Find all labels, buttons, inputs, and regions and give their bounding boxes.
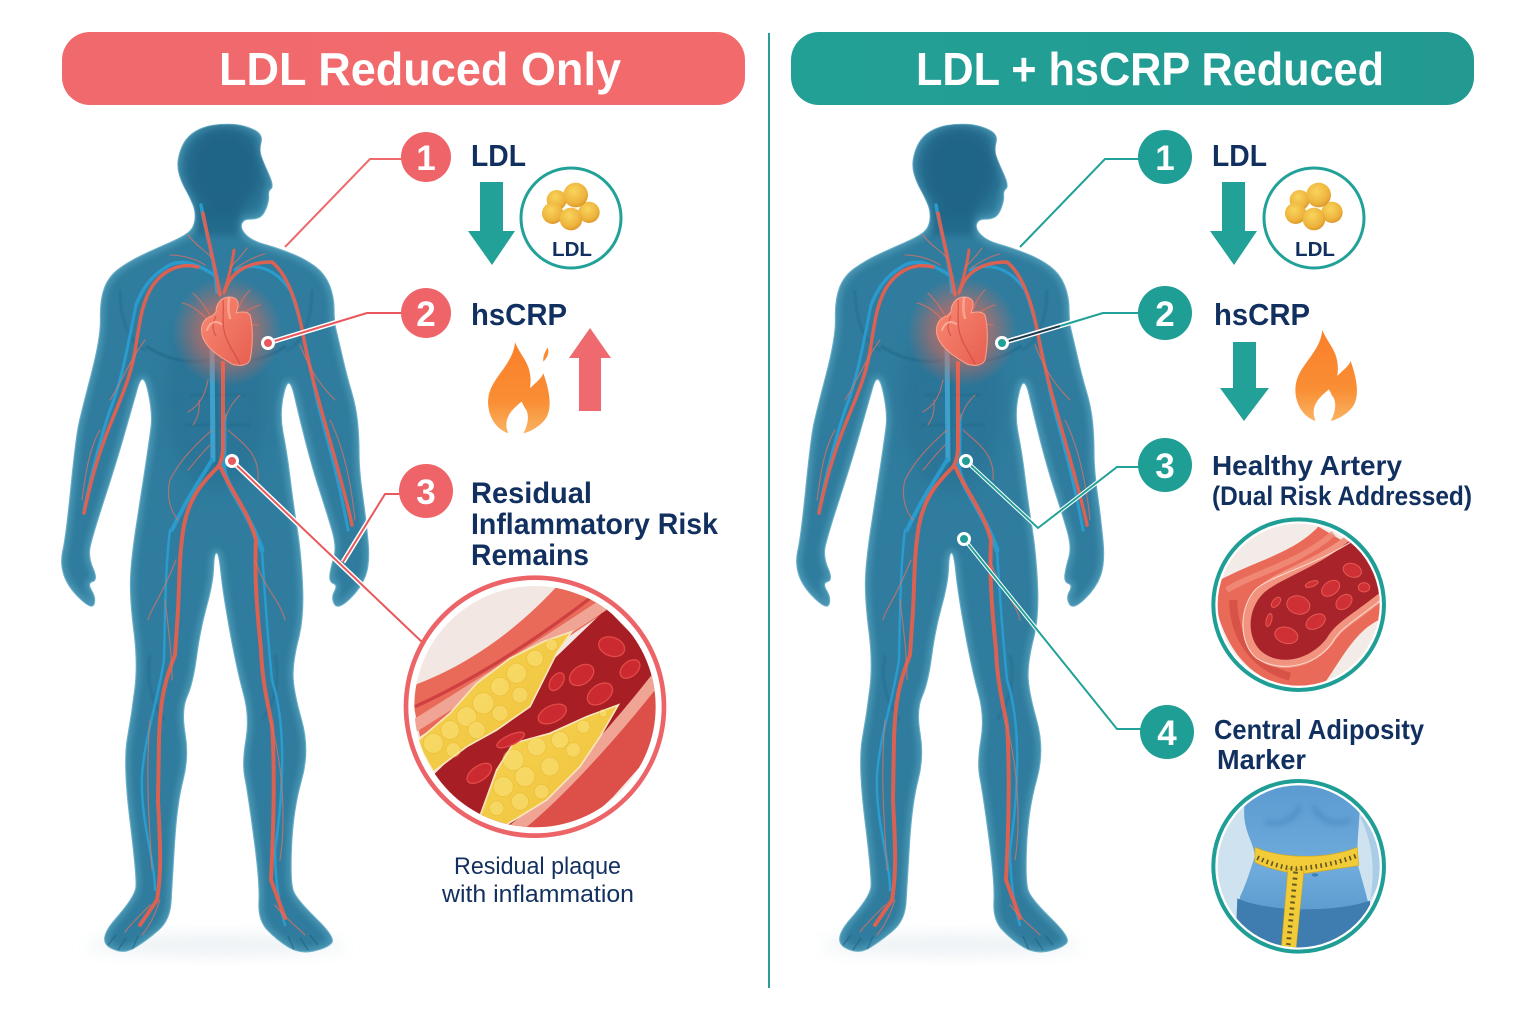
marker 2 bbox=[401, 288, 451, 338]
label: residual inflammatory risk: Remains bbox=[471, 539, 589, 572]
human body figure with circulation bbox=[797, 124, 1104, 955]
caption: residual plaque: Residual plaque bbox=[454, 853, 621, 880]
label: LDL: LDL bbox=[1212, 138, 1267, 173]
icon: LDL particles: LDL bbox=[1295, 239, 1335, 261]
marker 1: 1 bbox=[1155, 139, 1175, 178]
label: healthy artery: (Dual Risk Addressed) bbox=[1212, 481, 1472, 511]
icon: flame bbox=[1295, 330, 1357, 421]
marker 2: 2 bbox=[416, 295, 436, 334]
leader line to marker 4 bbox=[958, 534, 1142, 729]
panel: LDL Reduced Only bbox=[62, 32, 745, 955]
marker 1: 1 bbox=[416, 139, 436, 178]
icon: LDL particles: LDL bbox=[552, 239, 592, 261]
marker 4: 4 bbox=[1157, 714, 1177, 753]
marker 3: 3 bbox=[1155, 447, 1175, 486]
marker 1 bbox=[1138, 130, 1192, 184]
label: residual inflammatory risk: Residual bbox=[471, 477, 592, 510]
label: hsCRP: hsCRP bbox=[1214, 297, 1310, 332]
leader line to marker 3 bbox=[960, 456, 1142, 528]
label: central adiposity marker bbox=[1214, 714, 1424, 775]
label: hsCRP: hsCRP bbox=[471, 297, 567, 332]
leader line to marker 1 bbox=[285, 159, 402, 247]
arrow: hsCRP down bbox=[1220, 342, 1269, 421]
marker 2 bbox=[1138, 286, 1192, 340]
marker 3: 3 bbox=[416, 473, 436, 512]
arrow: LDL down bbox=[468, 182, 515, 265]
marker 3 bbox=[399, 464, 453, 518]
label: residual inflammatory risk: Inflammatory Risk bbox=[471, 508, 718, 541]
caption: residual plaque bbox=[441, 853, 634, 908]
detail circle: waist with measuring tape bbox=[1213, 780, 1387, 957]
label: healthy artery: Healthy Artery bbox=[1212, 450, 1402, 481]
marker 2: 2 bbox=[1155, 295, 1175, 334]
leader line to marker 2 bbox=[262, 313, 402, 348]
detail circle: artery with residual plaque bbox=[406, 578, 667, 837]
arrow: LDL down bbox=[1210, 182, 1257, 265]
heading banner: LDL + hsCRP Reduced: LDL + hsCRP Reduced bbox=[916, 43, 1384, 95]
icon: flame bbox=[488, 342, 550, 433]
leader lines to marker 3 and plaque detail bbox=[226, 456, 422, 642]
label: residual inflammatory risk bbox=[471, 477, 718, 572]
human body figure with circulation bbox=[62, 124, 369, 955]
icon: LDL particles bbox=[521, 168, 621, 268]
divider bbox=[768, 33, 770, 988]
marker 3 bbox=[1138, 438, 1192, 492]
heading banner: LDL + hsCRP Reduced bbox=[791, 32, 1474, 105]
label: healthy artery bbox=[1212, 450, 1472, 511]
caption: residual plaque: with inflammation bbox=[441, 881, 634, 908]
label: central adiposity marker: Marker bbox=[1217, 744, 1306, 775]
leader line to marker 2 bbox=[996, 313, 1142, 348]
label: central adiposity marker: Central Adiposity bbox=[1214, 714, 1424, 745]
heading banner: LDL Reduced Only bbox=[62, 32, 745, 105]
leader line to marker 1 bbox=[1020, 159, 1142, 247]
marker 4 bbox=[1140, 705, 1194, 759]
arrow: hsCRP up bbox=[569, 328, 611, 411]
icon: LDL particles bbox=[1264, 168, 1364, 268]
detail circle: healthy artery bbox=[1213, 519, 1387, 690]
heading banner: LDL Reduced Only: LDL Reduced Only bbox=[219, 43, 621, 95]
marker 1 bbox=[401, 132, 451, 182]
panel: LDL + hsCRP Reduced bbox=[791, 32, 1474, 957]
label: LDL: LDL bbox=[471, 138, 526, 173]
